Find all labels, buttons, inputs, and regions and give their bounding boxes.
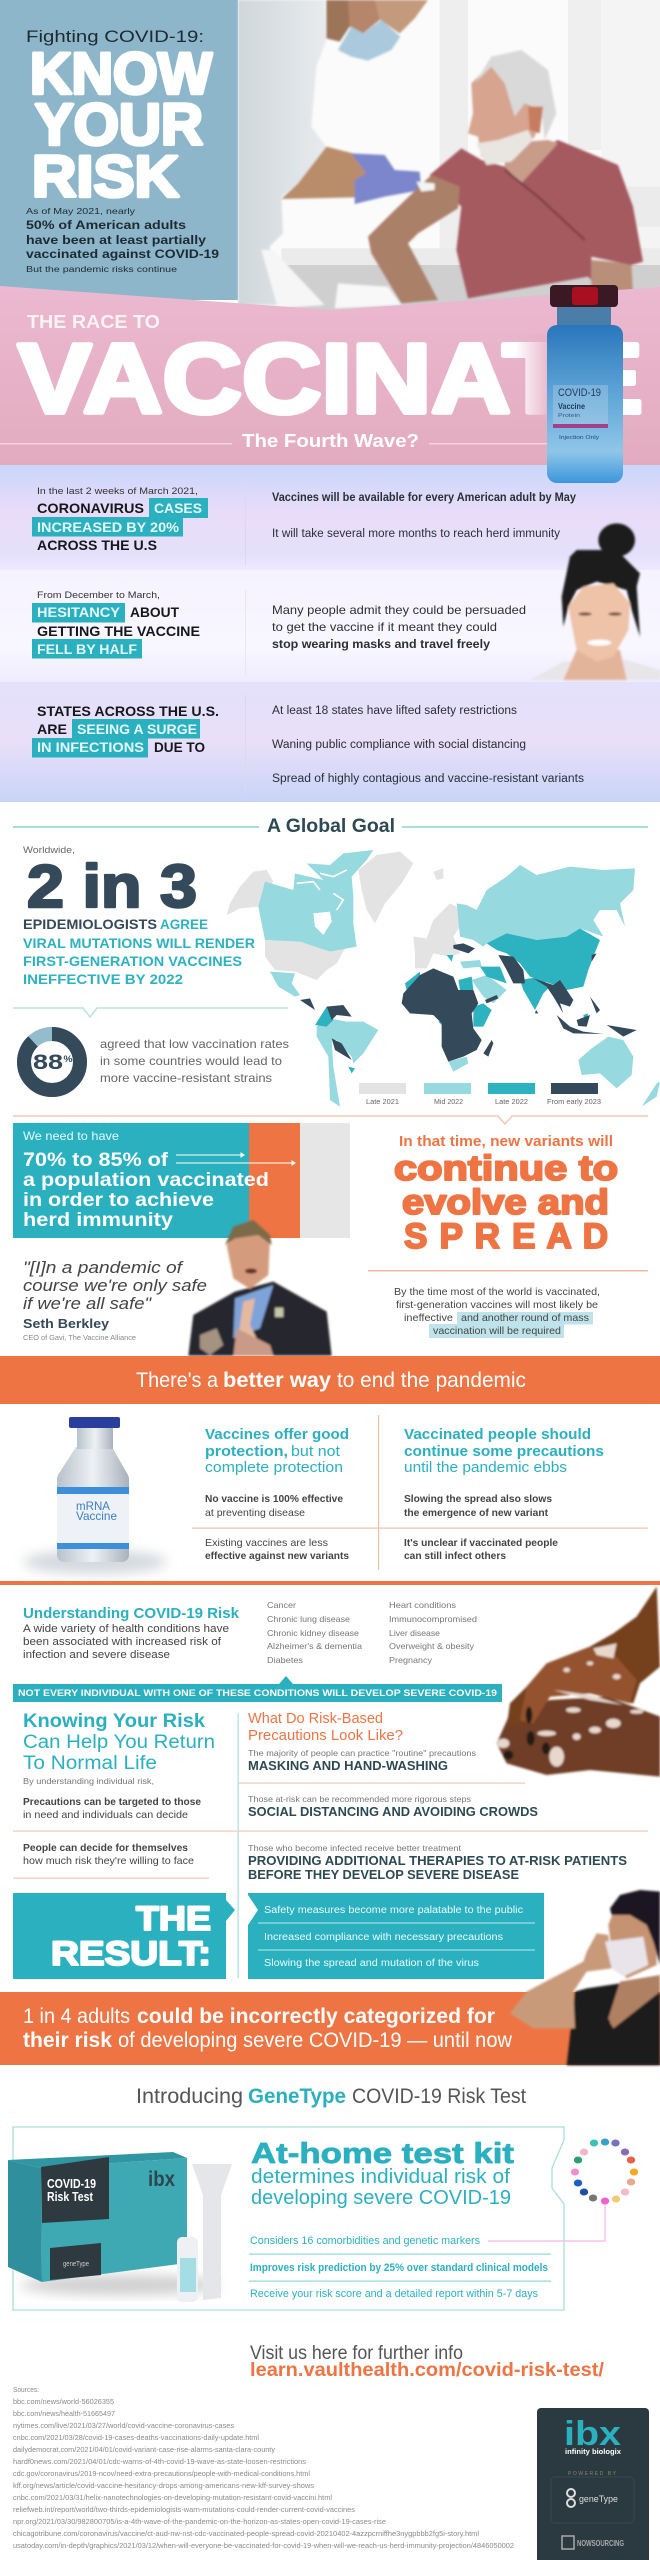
list: result outcomes: Slowing the spread and mutation of the virus [264, 1958, 479, 1969]
headline: continue to evolve and spread [394, 1149, 618, 1256]
list: result outcomes: Safety measures become more palatable to the public [264, 1905, 523, 1916]
panel: knowing your risk: Can Help You Return [23, 1732, 215, 1753]
heading: at-home test kit [251, 2138, 514, 2209]
panel: knowing your risk: To Normal Life [23, 1753, 157, 1774]
text block: sources: hardf0news.com/2021/04/01/cdc-warns-of-4th-covid-19-wave-as-state-loosen-restrictions [13, 2457, 306, 2466]
heading: at-home test kit: developing severe COVID-19 [251, 2187, 511, 2209]
heading and description: Understanding COVID-19 Risk [23, 1605, 240, 1622]
heading: Fighting COVID-19: Fighting COVID-19: [26, 27, 204, 46]
text block: surge in infections: SEEING A SURGE [77, 721, 197, 737]
headline: continue to evolve and spread: evolve and [402, 1183, 609, 1222]
legend: Late 2021 [366, 1099, 399, 1106]
list: health conditions: Immunocompromised [389, 1614, 477, 1624]
banner: 1 in 4 adults: of developing severe COVID-19 — until now [118, 2029, 513, 2052]
legend: From early 2023 [547, 1099, 601, 1106]
big stat: 2 in 3: 2 in 3 [27, 853, 197, 920]
text block: cases increased: CASES [154, 500, 202, 516]
list: kit features: Receive your risk score and a detailed report within 5-7 days [250, 2288, 538, 2300]
list: health conditions [267, 1600, 477, 1665]
text block: sources: kff.org/news/article/covid-vaccine-hesitancy-drops-among-americans-new-kff-survey-shows [13, 2481, 314, 2490]
panel: risk-based precautions [238, 1710, 627, 1882]
text: reasons for surge: Spread of highly contagious and vaccine-resistant variants [272, 773, 584, 785]
text block: sources [13, 2385, 514, 2550]
text block: surge in infections: ARE [37, 721, 67, 737]
text: viral mutations: FIRST-GENERATION VACCINES [23, 953, 242, 969]
heading: new variants: In that time, new variants will [399, 1133, 613, 1150]
text: viral mutations [23, 916, 255, 987]
text block: sources: cnbc.com/2021/03/28/covid-19-cases-deaths-vaccinations-daily-update.html [13, 2433, 259, 2442]
text: reasons for surge [272, 705, 584, 785]
text: persuasion note: stop wearing masks and travel freely [272, 637, 490, 651]
banner: better way to end the pandemic: There's a [136, 1369, 218, 1392]
text block: cases increased: ACROSS THE U.S [37, 537, 157, 553]
column: vaccines offer good protection: Existing vaccines are less [205, 1537, 328, 1549]
icon: blue COVID-19 vaccine vial: Injection Only [559, 435, 599, 441]
text block: hesitancy fell: From December to March, [37, 590, 160, 601]
banner: 1 in 4 adults: their risk [23, 2029, 112, 2052]
card: logos: POWERED BY [568, 2471, 617, 2477]
panel: herd immunity bar: herd immunity [23, 1210, 173, 1231]
list: health conditions: Diabetes [267, 1655, 303, 1665]
headline: continue to evolve and spread: continue to [394, 1149, 618, 1188]
text block: surge in infections: IN INFECTIONS [37, 739, 144, 755]
product: test kit box and swab [8, 2152, 232, 2302]
chart: 88 percent donut: 88 [33, 1051, 63, 1074]
banner: 1 in 4 adults: 1 in 4 adults [23, 2005, 130, 2028]
text: persuasion note: Many people admit they could be persuaded [272, 603, 526, 617]
panel: risk-based precautions: Those who become infected receive better treatment [248, 1843, 462, 1853]
heading and description: been associated with increased risk of [23, 1636, 222, 1648]
photo: smiling woman with hair bun [530, 523, 660, 680]
map: countries by timing [227, 850, 660, 1107]
column: vaccines offer good protection: but not [291, 1444, 340, 1460]
text block: sources: cnbc.com/2021/03/31/helix-nanotechnologies-on-developing-mutation-resistant-covid-vaccini.html [13, 2493, 332, 2502]
icon: genetic marker dot ring [488, 2138, 638, 2241]
logo: NowSourcing [562, 2536, 624, 2549]
panel: knowing your risk: By understanding individual risk, [23, 1776, 154, 1786]
heading: THE RESULT [51, 1900, 211, 1973]
panel: risk-based precautions: Precautions Look Like? [248, 1727, 403, 1744]
text: donut caption [100, 1037, 289, 1085]
text: vaccine availability points [272, 492, 577, 540]
column: vaccines offer good protection: at preventing disease [205, 1507, 305, 1519]
list: kit features [249, 2235, 551, 2300]
panel: vaccines and precautions [192, 1415, 648, 1570]
text: donut caption: more vaccine-resistant strains [100, 1071, 272, 1085]
logo: NowSourcing: NOWSOURCING [577, 2539, 624, 2548]
banner: not every individual [13, 1676, 502, 1702]
heading: Introducing GeneType: Introducing [136, 2085, 243, 2108]
quote: Seth Berkley: "[I]n a pandemic of [23, 1258, 185, 1277]
text block: sources: reliefweb.int/report/world/two-thirds-epidemiologists-warn-mutations-could-render-current-covid-vaccines [13, 2505, 355, 2514]
icon: blue COVID-19 vaccine vial: COVID-19 [558, 387, 601, 399]
card: logos [537, 2408, 649, 2560]
title: KNOW YOUR RISK [30, 42, 212, 210]
column: vaccinated people precautions: Vaccinated people should [404, 1427, 591, 1443]
title: KNOW YOUR RISK: KNOW [30, 42, 212, 106]
panel: header title block [0, 0, 238, 300]
photo: woman putting on mask [510, 1890, 660, 2065]
panel: knowing your risk: how much risk they're willing to face [23, 1855, 194, 1867]
text block: surge in infections: STATES ACROSS THE U.S. [37, 703, 219, 719]
product: test kit box and swab: ibx [148, 2168, 175, 2191]
legend: Late 2022 [495, 1099, 528, 1106]
panel: herd immunity bar: a population vaccinated [23, 1170, 269, 1191]
legend: Mid 2022 [434, 1099, 463, 1106]
list: kit features: Considers 16 comorbidities and genetic markers [250, 2235, 480, 2247]
list: result outcomes [258, 1905, 535, 1969]
panel: knowing your risk: in need and individuals can decide [23, 1809, 188, 1821]
text block: sources: dailydemocrat.com/2021/04/01/covid-variant-case-rise-alarms-santa-clara-county [13, 2445, 275, 2454]
panel: fourth wave evidence rows [0, 465, 660, 802]
panel: herd immunity bar: in order to achieve [23, 1190, 214, 1211]
list: health conditions: Liver disease [389, 1628, 440, 1638]
text: donut caption: agreed that low vaccination rates [100, 1037, 289, 1051]
column: vaccinated people precautions: can still infect others [404, 1550, 506, 1562]
product: test kit box and swab: geneType [63, 2261, 89, 2268]
text block: sources: bbc.com/news/health-51665497 [13, 2409, 115, 2418]
chart: 88 percent donut [24, 1034, 80, 1090]
list: health conditions: Alzheimer's & dementia [267, 1641, 362, 1651]
text block: sources: usatoday.com/in-depth/graphics/2021/03/12/when-will-everyone-be-vaccinated-for-covid-19-when-will-we-reach-us-herd-immunity-projection/4846050002 [13, 2541, 514, 2550]
quote: Seth Berkley [23, 1258, 207, 1342]
product: test kit box and swab: COVID-19 [47, 2176, 96, 2191]
text: viral mutations: AGREE [160, 916, 208, 932]
text: viral mutations: EPIDEMIOLOGISTS [23, 916, 157, 932]
column: vaccinated people precautions [404, 1427, 604, 1562]
text block: cases increased: In the last 2 weeks of March 2021, [37, 486, 198, 497]
banner: not every individual: NOT EVERY INDIVIDUAL WITH ONE OF THESE CONDITIONS WILL DEVELOP SEVERE COVID-19 [18, 1688, 497, 1699]
text block: surge in infections: DUE TO [154, 739, 205, 755]
text: vaccination statistic: As of May 2021, nearly [26, 206, 136, 216]
text block: sources: nytimes.com/live/2021/03/27/world/covid-vaccine-coronavirus-cases [13, 2421, 234, 2430]
text: mass vaccination note [394, 1286, 600, 1338]
text block: hesitancy fell [32, 590, 200, 658]
text: viral mutations: INEFFECTIVE BY 2022 [23, 971, 183, 987]
panel: risk-based precautions: BEFORE THEY DEVELOP SEVERE DISEASE [248, 1867, 519, 1882]
column: vaccines offer good protection: protection, [205, 1444, 288, 1460]
banner: 1 in 4 adults: could be incorrectly categorized for [137, 2005, 495, 2028]
text: mass vaccination note: By the time most of the world is vaccinated, [394, 1286, 600, 1298]
photo: Seth Berkley [188, 1220, 332, 1356]
text block: cases increased [32, 486, 208, 553]
panel: knowing your risk [13, 1711, 648, 1879]
text block: sources: bbc.com/news/world-56026355 [13, 2397, 114, 2406]
text: reasons for surge: Waning public compliance with social distancing [272, 739, 526, 751]
panel: herd immunity bar [13, 1123, 350, 1238]
call to action: further info link: learn.vaulthealth.com/covid-risk-test/ [250, 2360, 605, 2381]
text: viral mutations: VIRAL MUTATIONS WILL RENDER [23, 935, 255, 951]
icon: mRNA vaccine vial: mRNA [76, 1499, 110, 1513]
text: vaccine availability points: Vaccines will be available for every American adult by May [272, 492, 577, 504]
list: result outcomes: Increased compliance with necessary precautions [264, 1932, 503, 1943]
panel: at-home test kit [8, 2127, 638, 2310]
column: vaccinated people precautions: the emergence of new variant [404, 1507, 548, 1519]
text: vaccination statistic: have been at least partially [26, 235, 207, 247]
icon: blue COVID-19 vaccine vial: Protein [558, 413, 580, 419]
call to action: further info link [250, 2343, 605, 2381]
panel: risk-based precautions: Those at-risk can be recommended more rigorous steps [248, 1794, 471, 1804]
column: vaccinated people precautions: It's unclear if vaccinated people [404, 1537, 558, 1549]
panel: knowing your risk: Precautions can be targeted to those [23, 1796, 201, 1808]
logo: infinity biologix: infinity biologix [565, 2447, 622, 2456]
text: vaccine availability points: It will take several more months to reach herd immunity [272, 528, 560, 540]
photo: soapy hand washing [497, 1587, 660, 1777]
list: health conditions: Pregnancy [389, 1655, 433, 1665]
logo: geneType [567, 2489, 618, 2507]
text: vaccination statistic [26, 206, 219, 274]
quote: Seth Berkley: if we're all safe" [23, 1294, 152, 1313]
column: vaccines offer good protection: effective against new variants [205, 1550, 349, 1562]
heading: Introducing GeneType [136, 2085, 526, 2108]
list: health conditions: Overweight & obesity [389, 1641, 475, 1651]
panel: herd immunity bar: We need to have [23, 1129, 119, 1143]
text: vaccination statistic: 50% of American adults [26, 220, 186, 232]
quote: Seth Berkley: Seth Berkley [23, 1316, 110, 1331]
icon: blue COVID-19 vaccine vial: Vaccine [558, 401, 585, 411]
panel: knowing your risk: People can decide for themselves [23, 1842, 188, 1854]
panel: risk-based precautions: What Do Risk-Based [248, 1710, 383, 1727]
text block: sources: cdc.gov/coronavirus/2019-ncov/need-extra-precautions/people-with-medical-conditions.html [13, 2469, 310, 2478]
text: donut caption: in some countries would lead to [100, 1054, 282, 1068]
title: VACCINATE: VACCINATE [18, 324, 643, 434]
heading and description: A wide variety of health conditions have [23, 1623, 229, 1635]
column: vaccines offer good protection [205, 1427, 349, 1562]
title: KNOW YOUR RISK: RISK [32, 144, 179, 210]
list: health conditions: Cancer [267, 1600, 296, 1610]
panel: the result [13, 1893, 544, 1979]
banner: better way to end the pandemic [0, 1356, 660, 1404]
quote: Seth Berkley: CEO of Gavi, The Vaccine Alliance [23, 1335, 136, 1342]
heading and description: infection and severe disease [23, 1649, 170, 1661]
column: vaccines offer good protection: Vaccines offer good [205, 1427, 349, 1443]
text: persuasion note [272, 603, 526, 651]
panel: 2 in 3 epidemiologists: Worldwide, [23, 845, 75, 855]
headline: continue to evolve and spread: S P R E A D [404, 1217, 608, 1256]
icon: mRNA vaccine vial: Vaccine [76, 1509, 117, 1523]
panel: variants continue to evolve [368, 1133, 648, 1338]
panel: 2 in 3 epidemiologists [13, 845, 289, 1090]
panel: herd immunity bar: 70% to 85% of [23, 1150, 169, 1171]
text block: hesitancy fell: ABOUT [130, 604, 179, 620]
text block: cases increased: INCREASED BY 20% [37, 519, 180, 535]
photo: nurse vaccinating older man [238, 0, 660, 310]
text: mass vaccination note: and another round of mass [461, 1312, 589, 1324]
list: health conditions: Heart conditions [389, 1600, 456, 1610]
text block: hesitancy fell: FELL BY HALF [37, 641, 137, 657]
column: vaccines offer good protection: No vaccine is 100% effective [205, 1493, 343, 1505]
text: vaccination statistic: vaccinated against COVID-19 [26, 249, 219, 261]
text block: hesitancy fell: GETTING THE VACCINE [37, 623, 200, 639]
heading: Introducing GeneType: COVID-19 Risk Test [352, 2085, 526, 2108]
panel: risk-based precautions: The majority of people can practice "routine" precautions [248, 1748, 476, 1758]
icon: blue COVID-19 vaccine vial [547, 285, 623, 483]
panel: race to vaccinate banner [0, 286, 660, 465]
arrows [176, 1153, 295, 1165]
text block: surge in infections [32, 703, 219, 758]
column: vaccinated people precautions: until the pandemic ebbs [404, 1460, 567, 1476]
banner: 1 in 4 adults [0, 1992, 660, 2065]
text block: cases increased: CORONAVIRUS [37, 500, 144, 516]
legend [359, 1083, 601, 1106]
text: mass vaccination note: first-generation vaccines will most likely be [396, 1299, 598, 1311]
heading: THE RESULT: THE [136, 1900, 211, 1938]
text: mass vaccination note: vaccination will be required [433, 1325, 561, 1337]
text block: sources: chicagotribune.com/coronavirus/vaccine/ct-aud-nw-nst-cdc-vaccinated-people-spread-covid-20210402-4azzpcrniffhe3nygpbbb2fg5i-story.html [13, 2529, 479, 2538]
call to action: further info link: Visit us here for further info [250, 2343, 463, 2364]
text block: hesitancy fell: HESITANCY [37, 604, 121, 620]
heading: A Global Goal: A Global Goal [267, 816, 395, 837]
text: mass vaccination note: ineffective [404, 1312, 453, 1324]
logo: infinity biologix: ibx [564, 2415, 621, 2453]
banner: better way to end the pandemic: to end the pandemic [337, 1369, 526, 1392]
title: KNOW YOUR RISK: YOUR [35, 92, 203, 158]
heading: at-home test kit: determines individual risk of [251, 2166, 510, 2188]
heading: at-home test kit: At-home test kit [251, 2138, 514, 2170]
list: kit features: Improves risk prediction by 25% over standard clinical models [250, 2262, 548, 2274]
panel: knowing your risk: Knowing Your Risk [23, 1711, 205, 1732]
panel: risk-based precautions: PROVIDING ADDITIONAL THERAPIES TO AT-RISK PATIENTS [248, 1853, 627, 1868]
heading: the race to: THE RACE TO [27, 312, 160, 332]
quote: Seth Berkley: course we're only safe [23, 1276, 207, 1295]
panel: risk-based precautions: SOCIAL DISTANCING AND AVOIDING CROWDS [248, 1804, 538, 1819]
panel: understanding COVID-19 risk [13, 1600, 502, 1702]
heading and description [23, 1605, 240, 1661]
column: vaccines offer good protection: complete protection [205, 1460, 343, 1476]
panel: risk-based precautions: MASKING AND HAND-WASHING [248, 1758, 448, 1773]
heading: Introducing GeneType: GeneType [248, 2085, 346, 2108]
column: vaccinated people precautions: Slowing the spread also slows [404, 1493, 552, 1505]
text block: sources: Sources: [13, 2385, 39, 2394]
list: health conditions: Chronic lung disease [267, 1614, 350, 1624]
logo: geneType: geneType [579, 2494, 618, 2504]
product: test kit box and swab: Risk Test [47, 2189, 94, 2204]
text: vaccination statistic: But the pandemic risks continue [26, 264, 177, 274]
chart: 88 percent donut: % [64, 1054, 72, 1064]
heading: the fourth wave: The Fourth Wave? [242, 431, 419, 451]
column: vaccinated people precautions: continue some precautions [404, 1444, 604, 1460]
text: persuasion note: to get the vaccine if it meant they could [272, 620, 497, 634]
text block: sources: npr.org/2021/03/30/982800705/is-a-4th-wave-of-the-pandemic-on-the-horizon-as-states-open-covid-19-cases-rise [13, 2517, 386, 2526]
chart: world map of vaccination timing [227, 850, 660, 1107]
banner: better way to end the pandemic: better way [223, 1369, 331, 1392]
list: health conditions: Chronic kidney disease [267, 1628, 359, 1638]
text: reasons for surge: At least 18 states have lifted safety restrictions [272, 705, 517, 717]
icon: mRNA vaccine vial [23, 1417, 167, 1574]
heading: THE RESULT: RESULT: [51, 1935, 211, 1973]
